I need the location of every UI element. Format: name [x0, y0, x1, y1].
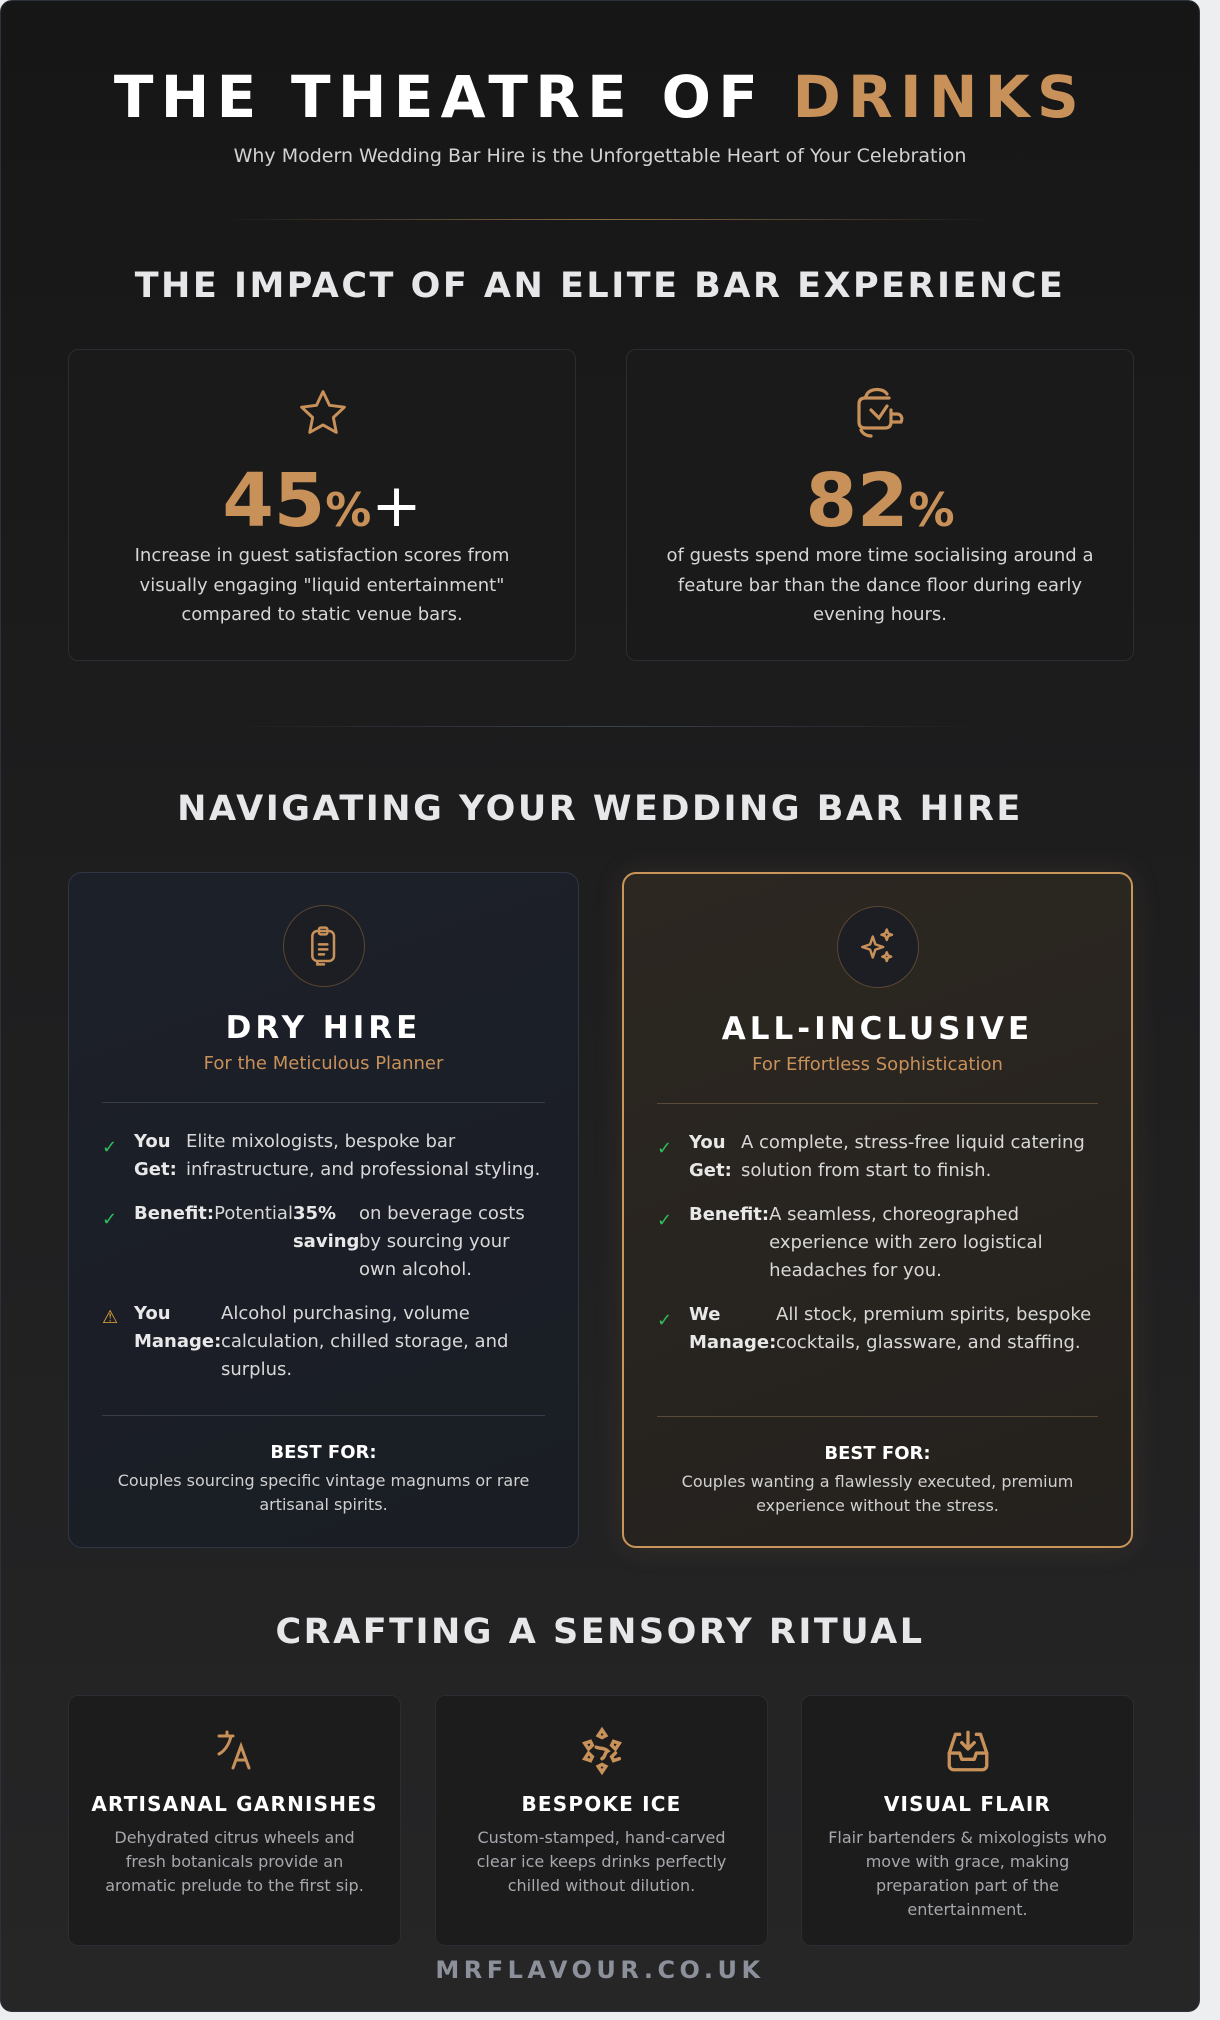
title: DRY HIRE: [226, 1010, 421, 1046]
description: Increase in guest satisfaction scores from visually engaging "liquid entertainment" compared to static venue bars.: [135, 545, 509, 625]
best for: BEST FOR:: [824, 1443, 931, 1464]
icon: clipboard: [282, 905, 364, 987]
best for: Couples sourcing specific vintage magnums or rare artisanal spirits.: [118, 1471, 529, 1514]
stat card: 45%: [68, 349, 576, 661]
icon: inbox: [948, 1730, 988, 1772]
title: ALL-INCLUSIVE: [722, 1011, 1033, 1047]
list: [657, 1132, 1091, 1353]
card: artisanal garnishes: [68, 1695, 401, 1946]
list: ✓: [657, 1310, 672, 1331]
list: ⚠: [102, 1307, 118, 1328]
list: ✓: [102, 1137, 117, 1158]
best for: BEST FOR:: [270, 1442, 377, 1463]
list: 35% saving: [293, 1203, 359, 1252]
title: THE THEATRE OF DRINKS: [114, 63, 1086, 131]
list: Benefit:: [134, 1203, 214, 1224]
panel: dry hire: [68, 872, 579, 1548]
best for: [118, 1442, 529, 1514]
heading: impact: THE IMPACT OF AN ELITE BAR EXPERIENCE: [135, 266, 1065, 306]
icon: ice: [582, 1726, 622, 1776]
icon: translate: [217, 1730, 250, 1770]
list: All stock, premium spirits, bespoke cocktails, glassware, and staffing.: [776, 1304, 1091, 1353]
subtitle: For the Meticulous Planner: [204, 1053, 443, 1074]
icon: bag: [857, 388, 904, 438]
number: 45%+: [222, 458, 422, 544]
list: You Get:: [689, 1132, 732, 1181]
list: Potential: [214, 1203, 293, 1224]
icon: star: [300, 390, 346, 434]
description: of guests spend more time socialising around a feature bar than the dance floor during early evening hours.: [666, 545, 1093, 625]
list: A seamless, choreographed experience with zero logistical headaches for you.: [769, 1204, 1043, 1281]
description: Flair bartenders & mixologists who move with grace, making preparation part of the entertainment.: [828, 1828, 1107, 1919]
list: ✓: [657, 1138, 672, 1159]
best for: Couples wanting a flawlessly executed, premium experience without the stress.: [682, 1472, 1073, 1515]
subtitle: Why Modern Wedding Bar Hire is the Unforgettable Heart of Your Celebration: [234, 145, 966, 167]
list: Alcohol purchasing, volume calculation, chilled storage, and surplus.: [221, 1303, 508, 1380]
list: You Manage:: [134, 1303, 221, 1352]
number: 82%: [805, 458, 955, 544]
list: You Get:: [134, 1131, 177, 1180]
list: Benefit:: [689, 1204, 769, 1225]
best for: [682, 1443, 1073, 1515]
title: ARTISANAL GARNISHES: [91, 1792, 378, 1816]
title: VISUAL FLAIR: [884, 1792, 1051, 1816]
title: BESPOKE ICE: [521, 1792, 682, 1816]
list: on beverage costs by sourcing your own alcohol.: [359, 1203, 525, 1280]
panel: all-inclusive: [622, 872, 1133, 1548]
list: ✓: [657, 1210, 672, 1231]
icon: sparkles: [836, 906, 918, 988]
card: bespoke ice: [435, 1695, 768, 1946]
subtitle: For Effortless Sophistication: [752, 1054, 1003, 1075]
stat card: 82%: [626, 349, 1134, 661]
list: We Manage:: [689, 1304, 776, 1353]
heading: crafting: CRAFTING A SENSORY RITUAL: [275, 1612, 925, 1652]
description: Custom-stamped, hand-carved clear ice keeps drinks perfectly chilled without dilution.: [477, 1828, 726, 1895]
heading: navigating: NAVIGATING YOUR WEDDING BAR HIRE: [177, 789, 1023, 829]
footer: MRFLAVOUR.CO.UK: [435, 1956, 765, 1984]
card: visual flair: [801, 1695, 1134, 1946]
list: [102, 1131, 540, 1380]
list: ✓: [102, 1209, 117, 1230]
list: Elite mixologists, bespoke bar infrastructure, and professional styling.: [186, 1131, 540, 1180]
list: A complete, stress-free liquid catering solution from start to finish.: [741, 1132, 1085, 1181]
description: Dehydrated citrus wheels and fresh botanicals provide an aromatic prelude to the first sip.: [105, 1828, 364, 1895]
